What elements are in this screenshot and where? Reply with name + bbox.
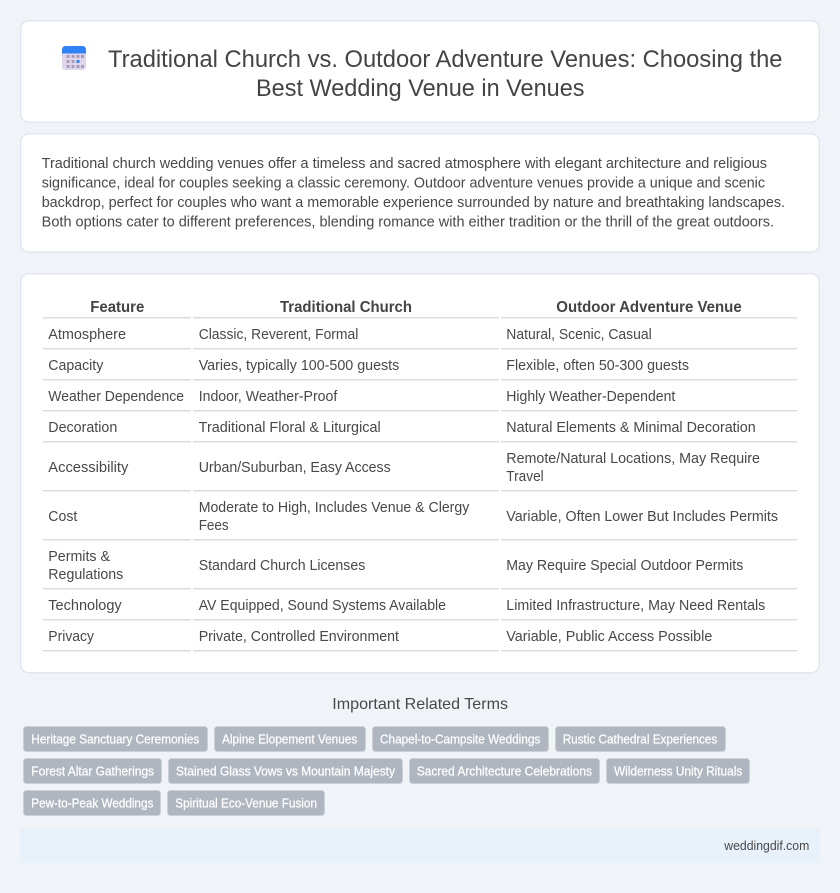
row: privacy: Variable, Public Access Possible <box>506 629 712 645</box>
tag: Pew-to-Peak Weddings <box>31 796 153 810</box>
row: cost: Fees <box>199 518 229 534</box>
tag: Wilderness Unity Rituals <box>614 764 742 778</box>
tag: Rustic Cathedral Experiences <box>563 732 717 746</box>
row: permits and regulations: May Require Special Outdoor Permits <box>506 558 743 574</box>
row: atmosphere: Classic, Reverent, Formal <box>199 327 358 343</box>
icon: calendar <box>62 46 86 70</box>
row: accessibility: Accessibility <box>48 460 129 476</box>
tag <box>606 758 750 784</box>
tag: Forest Altar Gatherings <box>31 764 154 778</box>
tag <box>556 726 726 752</box>
row: weather dependence: Highly Weather-Dependent <box>506 389 675 405</box>
text block: introduction paragraph: backdrop, perfect for couples who want a memorable experience surrounded by nature and breathtaking landscapes. <box>42 195 785 211</box>
table header: Feature <box>90 299 145 316</box>
row: technology: Limited Infrastructure, May Need Rentals <box>506 598 765 614</box>
text block: introduction paragraph: significance, ideal for couples seeking a classic ceremony. Outdoor adventure venues provide a unique and scenic <box>42 176 765 192</box>
tags: related terms <box>24 726 750 816</box>
row: decoration: Natural Elements & Minimal Decoration <box>506 420 756 436</box>
panel: title header <box>21 21 819 122</box>
heading: important related terms: Important Related Terms <box>332 696 508 713</box>
tag: Chapel-to-Campsite Weddings <box>380 732 540 746</box>
tag <box>410 758 600 784</box>
panel: comparison table <box>21 274 819 673</box>
row: technology: AV Equipped, Sound Systems Available <box>199 598 446 614</box>
row: atmosphere <box>48 327 652 343</box>
row: technology: Technology <box>48 598 123 614</box>
row: cost: Moderate to High, Includes Venue & Clergy <box>199 500 470 516</box>
row: atmosphere: Natural, Scenic, Casual <box>506 327 652 343</box>
text block: introduction paragraph: Traditional church wedding venues offer a timeless and sacred atmosphere with elegant architecture and religious <box>42 156 767 172</box>
row: decoration <box>48 420 756 436</box>
row: weather dependence: Weather Dependence <box>48 389 184 405</box>
row: accessibility: Travel <box>506 469 544 485</box>
footer <box>20 829 820 863</box>
tag <box>372 726 548 752</box>
text block: introduction paragraph: Both options cater to different preferences, blending romance with either tradition or the thrill of the great outdoors. <box>42 214 774 230</box>
tag <box>24 726 208 752</box>
row: privacy: Private, Controlled Environment <box>199 629 399 645</box>
table header: Traditional Church <box>280 299 412 316</box>
row: permits and regulations: Standard Church Licenses <box>199 558 365 574</box>
footer: weddingdif.com <box>723 838 809 853</box>
row: accessibility: Urban/Suburban, Easy Access <box>199 460 391 476</box>
row: capacity: Flexible, often 50-300 guests <box>506 358 689 374</box>
row: privacy: Privacy <box>48 629 95 645</box>
row: cost: Variable, Often Lower But Includes Permits <box>506 509 778 525</box>
tag <box>24 790 160 816</box>
row: capacity <box>48 358 689 374</box>
row: capacity: Varies, typically 100-500 guests <box>199 358 399 374</box>
table header: Outdoor Adventure Venue <box>556 299 742 316</box>
row: privacy <box>48 629 712 645</box>
title <box>108 46 782 102</box>
row: permits and regulations <box>48 549 743 583</box>
tag: Heritage Sanctuary Ceremonies <box>31 732 199 746</box>
tag <box>24 758 162 784</box>
tag <box>168 758 402 784</box>
row: decoration: Decoration <box>48 420 117 436</box>
tag: Spiritual Eco-Venue Fusion <box>175 796 317 810</box>
panel: introduction <box>21 134 819 252</box>
row: technology <box>48 598 765 614</box>
text block: introduction paragraph <box>42 156 785 230</box>
row: cost: Cost <box>48 509 77 525</box>
row: decoration: Traditional Floral & Liturgical <box>199 420 381 436</box>
row: accessibility: Remote/Natural Locations, May Require <box>506 451 760 467</box>
tag <box>168 790 324 816</box>
tag: Sacred Architecture Celebrations <box>417 764 592 778</box>
row: capacity: Capacity <box>48 358 104 374</box>
tag: Stained Glass Vows vs Mountain Majesty <box>176 764 396 778</box>
row: weather dependence: Indoor, Weather-Proof <box>199 389 338 405</box>
row: accessibility <box>48 451 760 485</box>
row: permits and regulations: Permits & <box>48 549 110 565</box>
tag <box>214 726 366 752</box>
table header <box>90 299 742 316</box>
title: Best Wedding Venue in Venues <box>256 75 584 102</box>
row: atmosphere: Atmosphere <box>48 327 126 343</box>
title: Traditional Church vs. Outdoor Adventure Venues: Choosing the <box>108 46 782 73</box>
tag: Alpine Elopement Venues <box>222 732 357 746</box>
row: weather dependence <box>48 389 675 405</box>
row: permits and regulations: Regulations <box>48 567 123 583</box>
row: cost <box>48 500 778 534</box>
